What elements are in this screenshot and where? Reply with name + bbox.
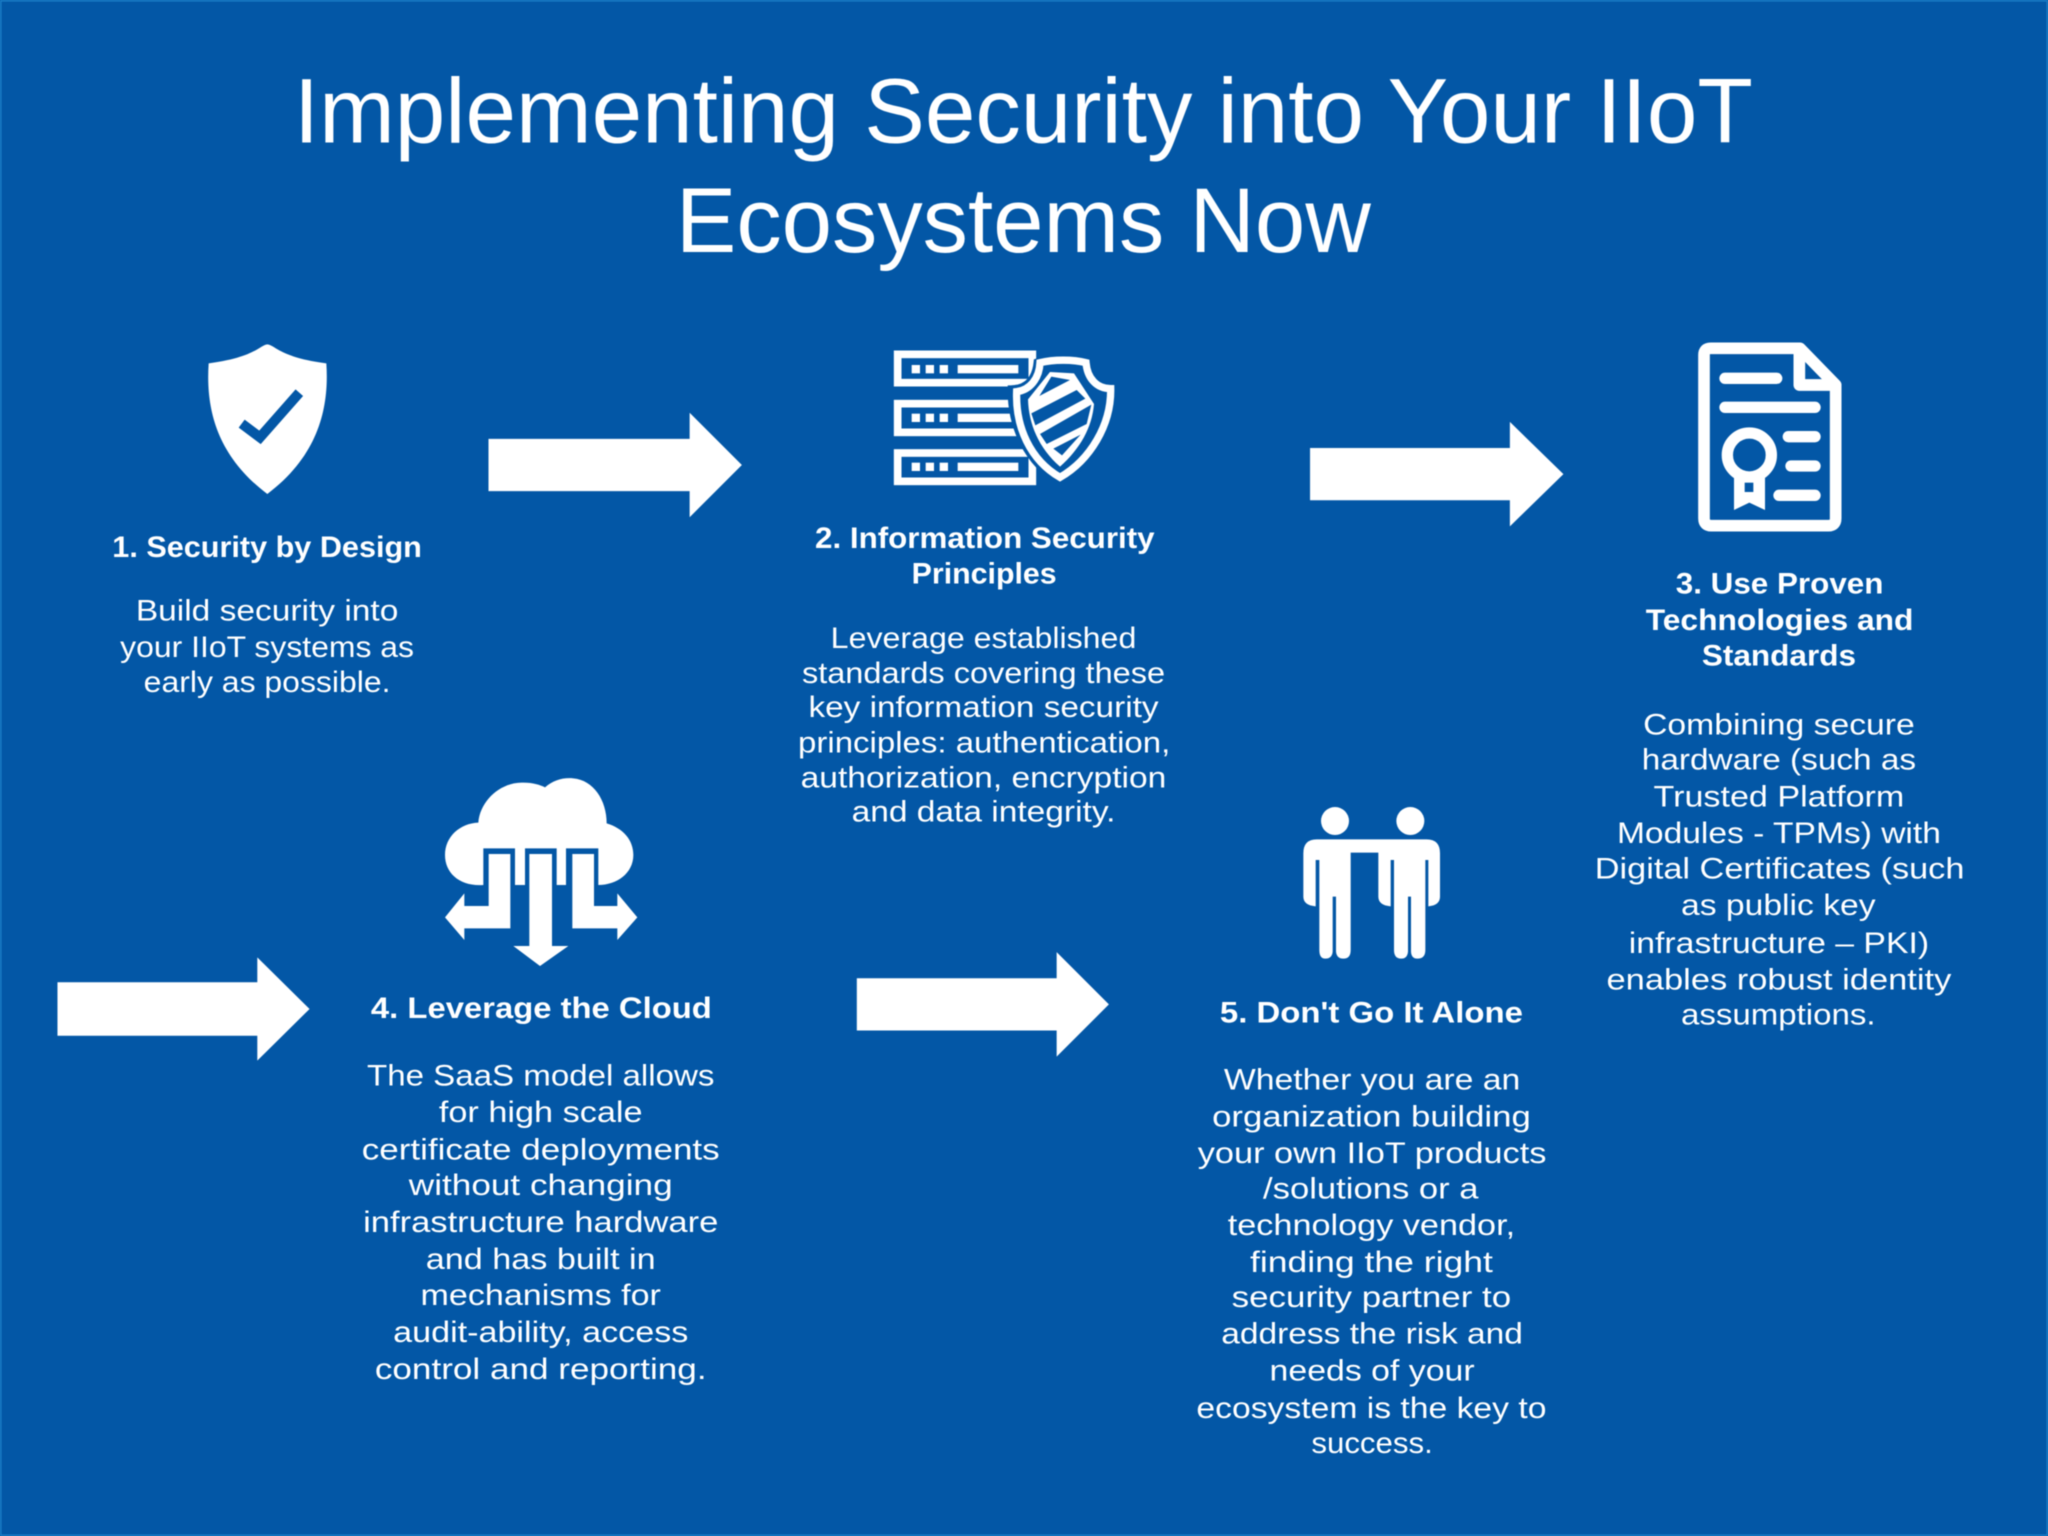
- body text: mechanisms for: [421, 1279, 661, 1312]
- body text: needs of your: [1270, 1355, 1475, 1388]
- heading: [1646, 568, 1913, 673]
- icon: servers with shield: [898, 354, 1114, 483]
- body text: enables robust identity: [1607, 963, 1952, 996]
- body text: security partner to: [1232, 1281, 1511, 1314]
- body text: principles: authentication,: [798, 726, 1170, 759]
- body text: infrastructure hardware: [363, 1206, 718, 1239]
- body text: Leverage established: [831, 622, 1136, 655]
- body text: and data integrity.: [852, 796, 1115, 829]
- heading: Technologies and: [1646, 604, 1913, 637]
- icon: cloud with three arrows: [445, 778, 637, 966]
- body text: Digital Certificates (such: [1595, 852, 1964, 885]
- body text: [1196, 1064, 1546, 1460]
- body text: Modules - TPMs) with: [1617, 817, 1941, 850]
- body text: success.: [1311, 1427, 1433, 1460]
- body text: infrastructure – PKI): [1629, 927, 1929, 960]
- panel: 4. Leverage the Cloud: [362, 778, 720, 1386]
- body text: hardware (such as: [1642, 744, 1916, 777]
- icon: certificate document: [1704, 348, 1836, 526]
- body text: authorization, encryption: [801, 762, 1166, 795]
- arrow: into step 4: [57, 957, 310, 1061]
- body text: The SaaS model allows: [367, 1059, 714, 1092]
- body text: [1595, 708, 1964, 1032]
- body text: control and reporting.: [375, 1353, 707, 1386]
- body text: and has built in: [426, 1243, 656, 1276]
- icon: two people: [1303, 807, 1440, 959]
- icon: shield with check mark: [208, 344, 327, 494]
- body text: ecosystem is the key to: [1196, 1392, 1546, 1425]
- body text: Build security into: [136, 594, 398, 627]
- panel: 5. Don't Go It Alone: [1196, 807, 1546, 1460]
- body text: [120, 594, 414, 699]
- heading: Principles: [912, 558, 1057, 591]
- panel: 3. Use Proven Technologies and Standards: [1595, 348, 1964, 1032]
- heading: 3. Use Proven: [1676, 568, 1883, 601]
- body text: Whether you are an: [1224, 1064, 1520, 1097]
- body text: audit-ability, access: [393, 1316, 688, 1349]
- panel: 1. Security by Design: [112, 344, 422, 699]
- body text: technology vendor,: [1228, 1209, 1515, 1242]
- heading: 4. Leverage the Cloud: [371, 992, 712, 1025]
- body text: [798, 622, 1170, 829]
- body text: Combining secure: [1643, 708, 1915, 741]
- arrow: step 4 to step 5: [857, 952, 1109, 1057]
- body text: certificate deployments: [362, 1133, 720, 1166]
- body text: early as possible.: [144, 666, 391, 699]
- body text: as public key: [1681, 889, 1876, 922]
- body text: your IIoT systems as: [120, 631, 414, 664]
- heading: 2. Information Security: [815, 522, 1155, 555]
- heading: Standards: [1702, 640, 1856, 673]
- body text: assumptions.: [1681, 999, 1876, 1032]
- body text: for high scale: [439, 1096, 643, 1129]
- body text: organization building: [1212, 1100, 1531, 1133]
- title: Ecosystems Now: [676, 169, 1371, 272]
- body text: your own IIoT products: [1198, 1137, 1546, 1170]
- panel: 2. Information Security Principles: [798, 354, 1170, 829]
- body text: [362, 1059, 720, 1386]
- body text: Trusted Platform: [1654, 780, 1904, 813]
- body text: /solutions or a: [1263, 1172, 1479, 1205]
- body text: finding the right: [1250, 1246, 1493, 1279]
- body text: address the risk and: [1221, 1317, 1523, 1350]
- body text: without changing: [408, 1169, 673, 1202]
- heading: 1. Security by Design: [112, 531, 422, 564]
- arrow: step 2 to step 3: [1310, 422, 1563, 526]
- heading: 5. Don't Go It Alone: [1220, 997, 1523, 1030]
- heading: [815, 522, 1155, 591]
- title: [294, 59, 1753, 272]
- title: Implementing Security into Your IIoT: [294, 59, 1753, 162]
- arrow: step 1 to step 2: [488, 413, 742, 517]
- body text: key information security: [808, 691, 1159, 724]
- body text: standards covering these: [802, 657, 1165, 690]
